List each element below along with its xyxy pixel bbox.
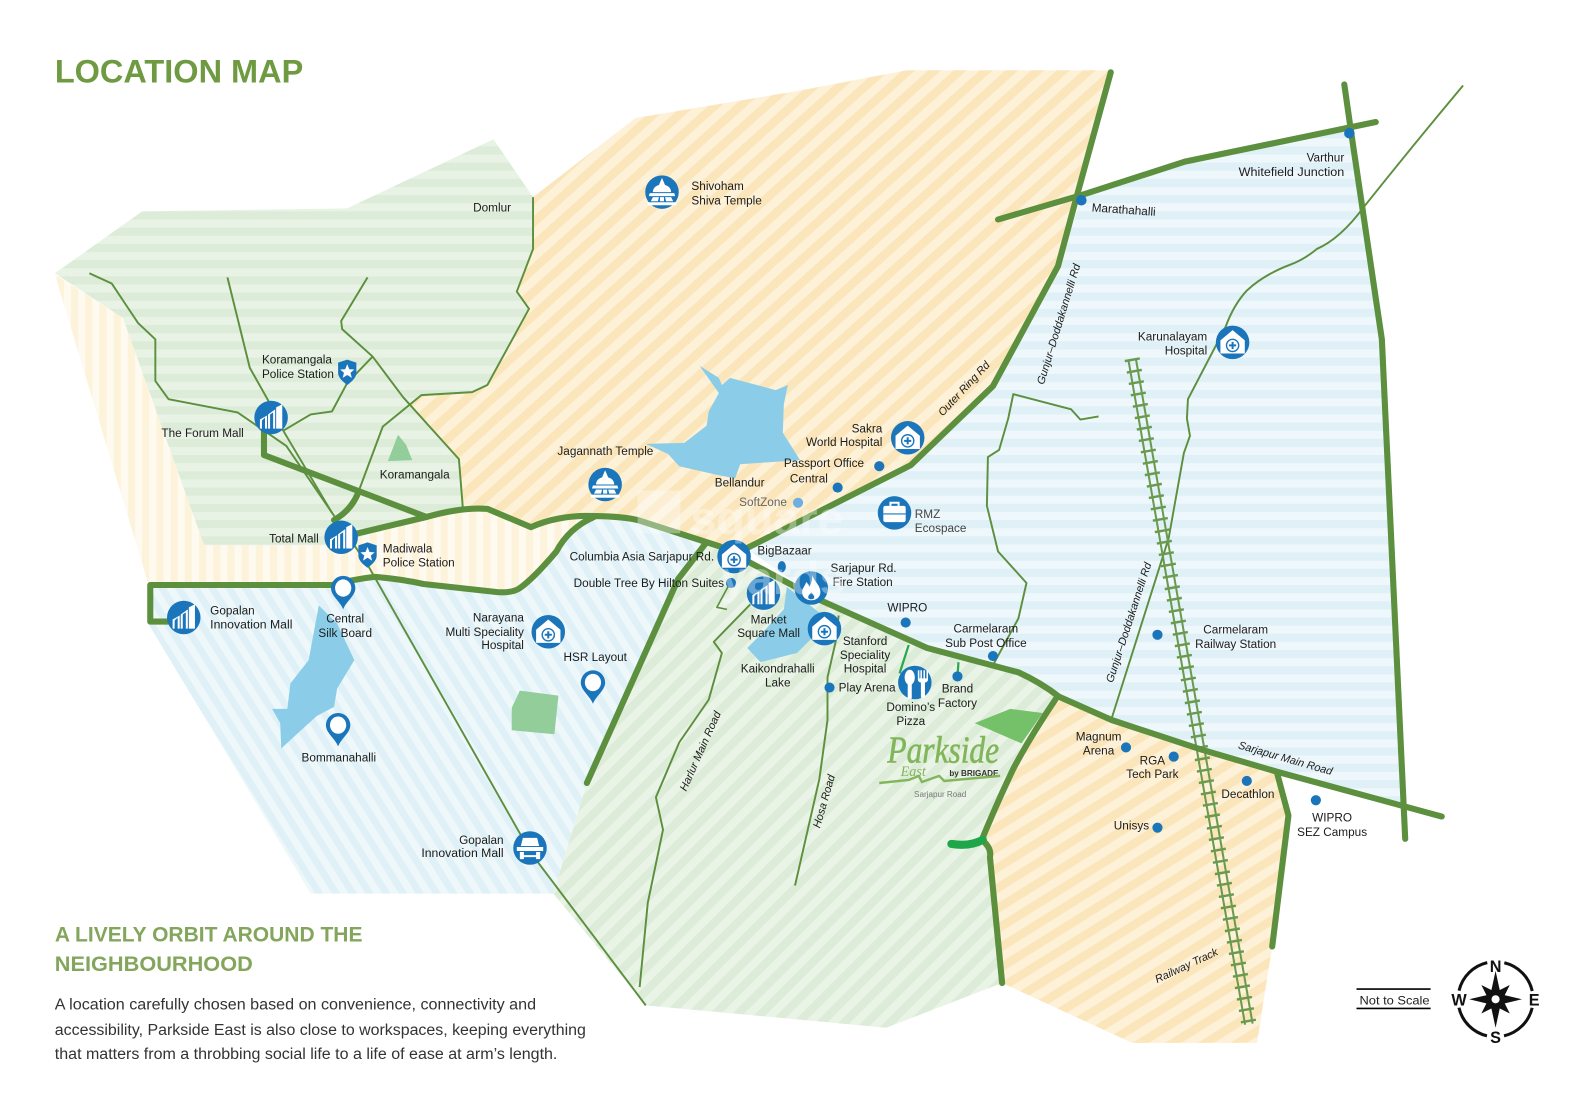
label: Stanford Speciality Hospital: Stanford	[843, 635, 887, 648]
road: site access stub	[951, 840, 983, 845]
label: Magnum Arena: Arena	[1083, 745, 1115, 758]
logo: Parkside East by Brigade: by BRIGADE	[949, 769, 999, 778]
label: Magnum Arena: Magnum	[1076, 730, 1121, 743]
label: Carmelaram Railway Station: Railway Station	[1195, 638, 1276, 651]
icon: Karunalayam hospital	[1216, 326, 1249, 359]
icon: Narayana hospital	[532, 615, 565, 648]
location dots	[726, 128, 1355, 833]
heading: A lively orbit: NEIGHBOURHOOD	[55, 952, 253, 976]
road label: Gunjur-Doddakannelli Rd upper: Gunjur–Doddakannelli Rd	[1035, 262, 1084, 386]
icon: pin Central Silk Board	[331, 576, 355, 609]
label: Sakra World Hospital: World Hospital	[806, 436, 882, 449]
road label: Outer Ring Rd: Outer Ring Rd	[936, 359, 993, 419]
icon: fire station	[794, 571, 828, 605]
label: Narayana Multi Speciality Hospital: Hospital	[481, 639, 524, 652]
region: central orange zone	[408, 70, 1109, 548]
region: south green zone	[553, 543, 1059, 1028]
label: Whitefield Junction: Whitefield Junction	[1239, 166, 1344, 179]
road label: Harlur Main Road: Harlur Main Road	[678, 709, 724, 793]
label: Brand Factory: Factory	[938, 697, 977, 710]
icon: Koramangala police	[338, 360, 356, 385]
label: Gopalan Innovation Mall west: Gopalan	[210, 604, 255, 617]
icon: Stanford hospital	[808, 612, 841, 645]
label: Decathlon: Decathlon	[1221, 788, 1274, 801]
label: Brand Factory: Brand	[942, 683, 973, 696]
label: Narayana Multi Speciality Hospital: Narayana	[473, 612, 524, 625]
label: Shivoham Shiva Temple: Shiva Temple	[691, 194, 762, 207]
label: Stanford Speciality Hospital: Speciality	[840, 649, 890, 662]
label: Carmelaram Sub Post Office: Sub Post Office	[945, 637, 1027, 650]
label: Koramangala: Koramangala	[380, 468, 450, 481]
road label: Gunjur-Doddakannelli Rd lower: Gunjur–Doddakannelli Rd	[1104, 560, 1155, 684]
road label: Hosa Road: Hosa Road	[811, 773, 838, 829]
label: Bellandur: Bellandur	[715, 477, 765, 490]
label: WIPRO SEZ Campus: WIPRO	[1312, 812, 1352, 825]
label: Carmelaram Railway Station: Carmelaram	[1203, 624, 1268, 637]
compass: E	[1529, 991, 1540, 1009]
label: Kaikondrahalli Lake: Kaikondrahalli	[741, 662, 815, 675]
label: Jagannath Temple: Jagannath Temple	[557, 445, 654, 458]
icon: Jagannath temple	[588, 468, 622, 501]
label: Marathahalli: Marathahalli	[1091, 201, 1156, 219]
label: Domlur: Domlur	[473, 201, 511, 214]
label: BigBazaar: BigBazaar	[757, 545, 812, 558]
compass: S	[1490, 1029, 1501, 1047]
icon: Sakra hospital	[891, 421, 924, 455]
patch: Koramangala	[388, 435, 412, 461]
region: north-west green zone	[55, 139, 533, 545]
label: Central Silk Board: Central	[326, 613, 364, 626]
label: Bommanahalli: Bommanahalli	[302, 752, 376, 765]
compass: N	[1490, 958, 1501, 976]
label: Sarjapur Rd. Fire Station: Sarjapur Rd.	[831, 562, 897, 575]
watermark: square	[690, 492, 844, 544]
label: Gopalan Innovation Mall west: Innovation Mall	[210, 619, 292, 632]
icon: bus stand / table	[513, 831, 547, 865]
label: Gopalan Innovation Mall south: Gopalan	[459, 834, 504, 847]
watermark: yards	[721, 552, 845, 604]
icon: Total Mall	[324, 521, 358, 554]
label: Domino's Pizza: Domino’s	[886, 701, 935, 714]
logo: Parkside East by Brigade: Parkside	[887, 731, 999, 772]
label: Sakra World Hospital: Sakra	[852, 423, 882, 436]
label: Columbia Asia Sarjapur Rd.: Columbia Asia Sarjapur Rd.	[570, 551, 714, 564]
body text: accessibility, Parkside East is also close to workspaces, keeping everything	[55, 1022, 586, 1039]
label: Koramangala Police Station: Police Station	[262, 368, 334, 381]
thin roads	[89, 85, 1463, 1005]
label: HSR Layout: HSR Layout	[564, 651, 628, 664]
body text: A location carefully chosen based on convenience, connectivity and	[55, 996, 536, 1013]
icon: pin Bommanahalli	[326, 713, 350, 746]
railway track	[1128, 359, 1253, 1025]
label: Kaikondrahalli Lake: Lake	[765, 677, 791, 690]
lake: Bellandur	[646, 366, 800, 478]
compass	[1451, 958, 1540, 1047]
icon: restaurant	[898, 666, 932, 699]
body text	[55, 996, 586, 1063]
label: Passport Office Central: Passport Office	[784, 457, 864, 470]
label: Play Arena: Play Arena	[839, 682, 896, 695]
label: Double Tree By Hilton Suites: Double Tree By Hilton Suites	[574, 577, 724, 590]
patch: HSR Layout	[512, 691, 558, 734]
icon: The Forum Mall	[254, 401, 288, 434]
label: Narayana Multi Speciality Hospital: Multi Speciality	[445, 626, 524, 639]
lake: Silk Board	[272, 605, 354, 748]
label: Karunalayam Hospital: Karunalayam	[1138, 330, 1207, 343]
label: Central Silk Board: Silk Board	[318, 627, 372, 640]
label: Karunalayam Hospital: Hospital	[1165, 345, 1207, 358]
road: bright green branches	[900, 645, 958, 676]
label: Gopalan Innovation Mall south: Innovation Mall	[421, 847, 504, 860]
thick roads	[150, 72, 1442, 983]
body text: that matters from a throbbing social life to a life of ease at arm’s length.	[55, 1046, 557, 1063]
lake: Kaikondrahalli	[747, 587, 820, 662]
label: Market Square Mall: Market	[751, 614, 787, 627]
label: SoftZone: SoftZone	[739, 496, 787, 509]
label: WIPRO: WIPRO	[887, 601, 927, 614]
not to scale note	[1356, 989, 1431, 1008]
logo: Parkside East by Brigade: East	[900, 764, 927, 780]
patch: Parkside site	[975, 709, 1043, 743]
heading: A lively orbit: A LIVELY ORBIT AROUND THE	[55, 922, 362, 946]
label: Sarjapur Rd. Fire Station: Fire Station	[833, 576, 893, 589]
label: Unisys: Unisys	[1114, 820, 1149, 833]
road label: Railway Track: Railway Track	[1153, 946, 1220, 986]
region: north-east blue zone	[746, 127, 1403, 807]
icon: RMZ briefcase	[878, 496, 911, 530]
icon: Columbia Asia hospital	[717, 540, 751, 573]
title: LOCATION MAP	[55, 53, 303, 89]
compass: W	[1451, 991, 1467, 1009]
icon: pin HSR Layout	[581, 670, 605, 704]
icon: Madiwala police	[358, 542, 377, 568]
label: WIPRO SEZ Campus: SEZ Campus	[1297, 826, 1367, 839]
label: Madiwala Police Station: Police Station	[383, 557, 455, 570]
region: west yellow zone	[55, 274, 587, 592]
label: Shivoham Shiva Temple: Shivoham	[691, 180, 744, 193]
label: Domino's Pizza: Pizza	[896, 715, 926, 728]
label: RMZ Ecospace: RMZ	[915, 508, 940, 521]
icon: Shivoham temple	[645, 175, 679, 209]
not to scale note: Not to Scale	[1360, 993, 1430, 1007]
label: Koramangala Police Station: Koramangala	[262, 354, 332, 367]
icon: Gopalan Innovation Mall west	[167, 601, 201, 634]
label: Stanford Speciality Hospital: Hospital	[844, 662, 886, 675]
label: Madiwala Police Station: Madiwala	[383, 543, 432, 556]
label: RGA Tech Park: RGA	[1140, 755, 1165, 768]
label: Varthur Whitefield Junction: Varthur	[1307, 152, 1344, 165]
road label: Sarjapur Main Road: Sarjapur Main Road	[1237, 740, 1335, 778]
label: Passport Office Central: Central	[790, 472, 828, 485]
label: RGA Tech Park: Tech Park	[1126, 768, 1179, 781]
label: RMZ Ecospace: Ecospace	[915, 522, 967, 535]
region: south-east orange zone	[982, 697, 1288, 1043]
icon: Market Square Mall	[747, 576, 780, 610]
label: Market Square Mall: Square Mall	[737, 627, 800, 640]
logo: Parkside East by Brigade: Sarjapur Road	[914, 790, 966, 799]
logo: Parkside East by Brigade	[879, 731, 1000, 799]
label: The Forum Mall: The Forum Mall	[161, 427, 244, 440]
label: Carmelaram Sub Post Office: Carmelaram	[954, 623, 1018, 636]
watermark	[638, 491, 845, 604]
label: Total Mall: Total Mall	[269, 532, 319, 545]
region: south-west blue zone	[148, 516, 720, 894]
